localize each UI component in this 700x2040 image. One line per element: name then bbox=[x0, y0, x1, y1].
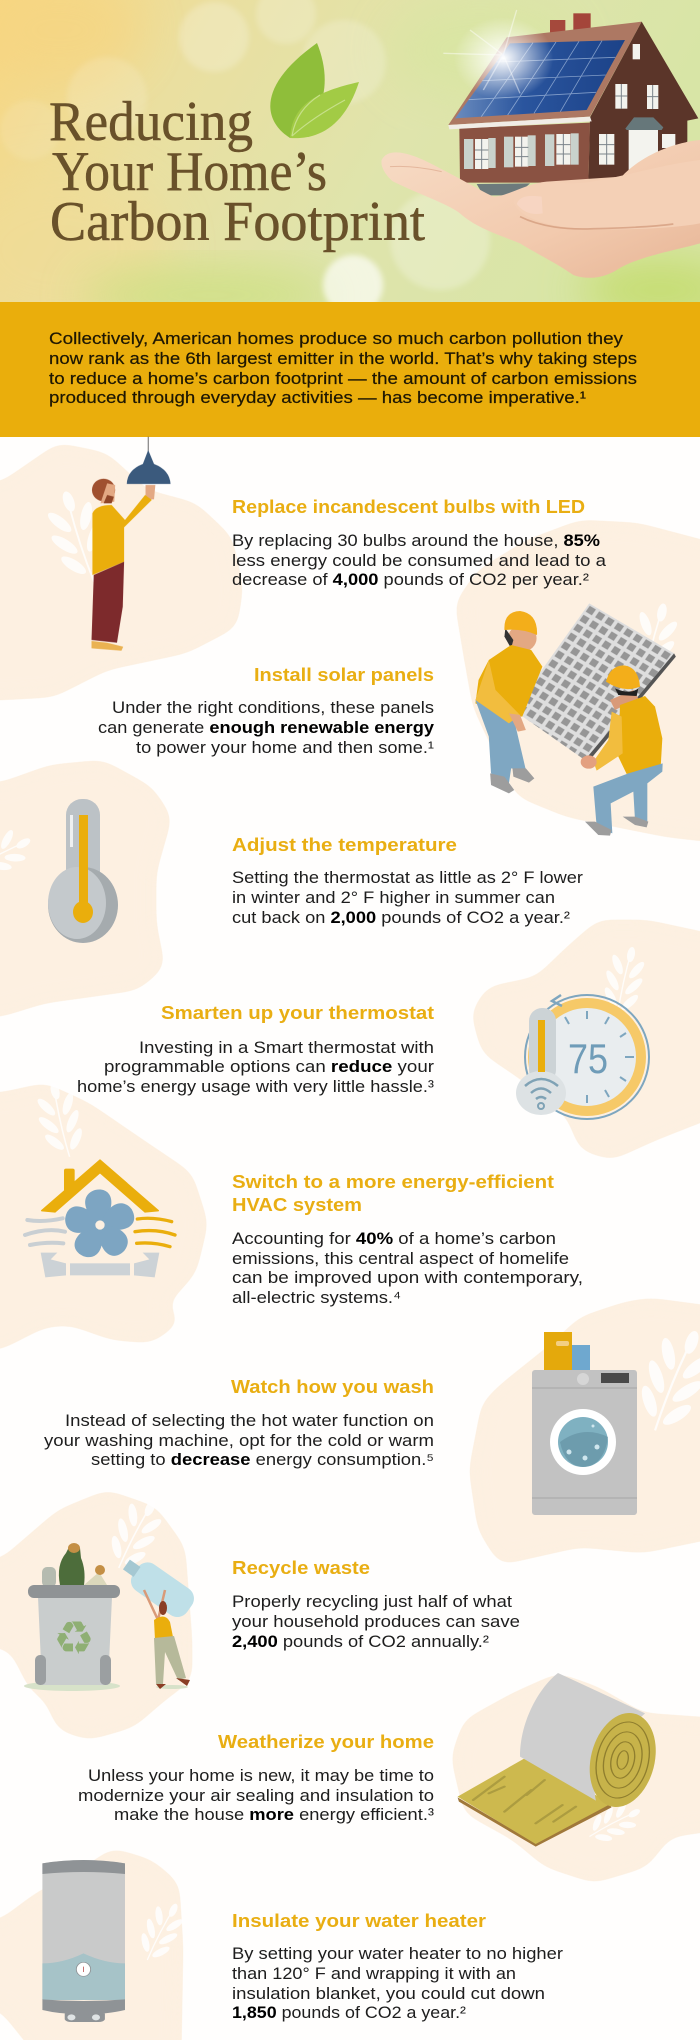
panel: water heater bbox=[42, 1860, 564, 2022]
intro band: to reduce a home’s carbon footprint — the amount of carbon emissions bbox=[49, 370, 637, 388]
icon: workers carrying a solar panel bbox=[475, 603, 676, 836]
heading: Switch to a more energy-efficient bbox=[232, 1171, 554, 1192]
icon: green leaves bbox=[270, 43, 359, 138]
icon: water heater bbox=[42, 1860, 125, 2022]
body text: can be improved upon with contemporary, bbox=[232, 1269, 583, 1287]
title bbox=[49, 91, 425, 253]
heading: Smarten up your thermostat bbox=[161, 1002, 434, 1023]
icon: recycling bin and woman with bottle: ♻ bbox=[53, 1611, 95, 1665]
body text: Investing in a Smart thermostat with bbox=[139, 1039, 434, 1057]
icon: house held in a hand bbox=[381, 10, 700, 278]
heading: Recycle waste bbox=[232, 1557, 370, 1578]
title: Reducing bbox=[49, 91, 253, 153]
panel: HVAC bbox=[25, 1160, 583, 1307]
heading: Weatherize your home bbox=[218, 1731, 434, 1752]
background blobs bbox=[0, 443, 700, 2040]
icon: man changing a light bulb bbox=[92, 437, 171, 651]
body text: your washing machine, opt for the cold or warm bbox=[44, 1432, 434, 1450]
body text bbox=[78, 1767, 435, 1824]
body text: Accounting for 40% of a home’s carbon bbox=[232, 1230, 556, 1248]
body text: Setting the thermostat as little as 2° F lower bbox=[232, 869, 584, 887]
heading bbox=[232, 1171, 554, 1215]
body text bbox=[232, 532, 607, 589]
panel: washing bbox=[44, 1332, 637, 1515]
body text: modernize your air sealing and insulation to bbox=[78, 1787, 434, 1805]
heading: Replace incandescent bulbs with LED bbox=[232, 496, 585, 517]
body text: Properly recycling just half of what bbox=[232, 1593, 512, 1611]
body text: programmable options can reduce your bbox=[104, 1058, 435, 1076]
intro band: produced through everyday activities — has become imperative.¹ bbox=[49, 389, 587, 407]
title: Carbon Footprint bbox=[50, 191, 425, 253]
label: 75: 75 bbox=[568, 1035, 608, 1082]
icon: thermometer bbox=[48, 799, 118, 943]
body text: emissions, this central aspect of homelife bbox=[232, 1250, 569, 1268]
body text: insulation blanket, you could cut down bbox=[232, 1985, 545, 2003]
heading: Insulate your water heater bbox=[232, 1910, 486, 1931]
body text: all-electric systems.⁴ bbox=[232, 1289, 401, 1307]
intro band: Collectively, American homes produce so much carbon pollution they bbox=[49, 330, 624, 348]
body text: decrease of 4,000 pounds of CO2 per year.² bbox=[232, 571, 590, 589]
panel: recycle bbox=[24, 1543, 520, 1691]
body text bbox=[44, 1412, 434, 1469]
heading: Adjust the temperature bbox=[232, 834, 457, 855]
body text: Unless your home is new, it may be time to bbox=[88, 1767, 434, 1785]
body text: less energy could be consumed and lead to a bbox=[232, 552, 607, 570]
body text: in winter and 2° F higher in summer can bbox=[232, 889, 555, 907]
body text: 1,850 pounds of CO2 a year.² bbox=[232, 2004, 467, 2022]
body text: Under the right conditions, these panels bbox=[112, 699, 434, 717]
icon: washing machine bbox=[532, 1332, 637, 1515]
intro band bbox=[0, 302, 700, 437]
heading: Install solar panels bbox=[254, 664, 434, 685]
body text bbox=[77, 1039, 435, 1096]
heading: Watch how you wash bbox=[231, 1376, 434, 1397]
panel: smart thermostat bbox=[77, 995, 649, 1119]
hero banner bbox=[0, 0, 700, 330]
icon: house with fan bbox=[25, 1160, 175, 1277]
body text: to power your home and then some.¹ bbox=[136, 739, 435, 757]
panel: replace bulbs bbox=[92, 437, 607, 651]
icon: insulation roll bbox=[458, 1673, 663, 1847]
body text: can generate enough renewable energy bbox=[98, 719, 435, 737]
body text bbox=[232, 1593, 520, 1651]
body text bbox=[232, 1945, 564, 2022]
body text: cut back on 2,000 pounds of CO2 a year.² bbox=[232, 909, 571, 927]
heading: HVAC system bbox=[232, 1194, 362, 1215]
body text: home’s energy usage with very little hassle.³ bbox=[77, 1078, 435, 1096]
body text: By setting your water heater to no higher bbox=[232, 1945, 564, 1963]
body text: than 120° F and wrapping it with an bbox=[232, 1965, 516, 1983]
panel: weatherize bbox=[78, 1673, 663, 1847]
body text: Instead of selecting the hot water function on bbox=[65, 1412, 434, 1430]
icon: smart thermostat dial bbox=[516, 995, 649, 1119]
body text bbox=[232, 1230, 583, 1307]
panel: solar panels bbox=[98, 603, 676, 836]
icon: recycling bin and woman with bottle bbox=[24, 1543, 199, 1691]
title: Your Home’s bbox=[52, 141, 327, 203]
body text: your household produces can save bbox=[232, 1613, 520, 1631]
body text bbox=[232, 869, 584, 927]
body text: 2,400 pounds of CO2 annually.² bbox=[232, 1633, 490, 1651]
intro band: now rank as the 6th largest emitter in the world. That’s why taking steps bbox=[49, 350, 637, 368]
body text: setting to decrease energy consumption.⁵ bbox=[91, 1451, 434, 1469]
body text bbox=[98, 699, 435, 757]
body text: make the house more energy efficient.³ bbox=[114, 1806, 435, 1824]
body text: By replacing 30 bulbs around the house, 85% bbox=[232, 532, 600, 550]
panel: adjust temperature bbox=[48, 799, 584, 943]
